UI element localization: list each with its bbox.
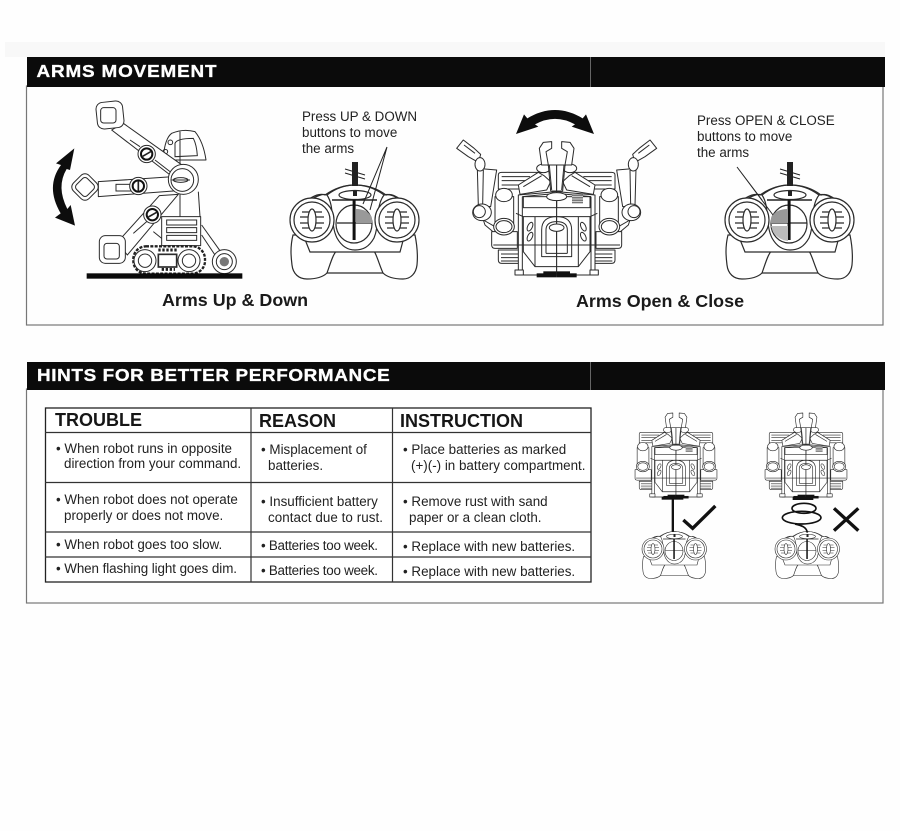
row: does not operate: • Remove rust with sand — [403, 494, 548, 509]
table header row: REASON — [259, 411, 336, 431]
robot front small — [635, 413, 717, 498]
row: opposite direction: • Place batteries as marked — [403, 442, 566, 457]
row: does not operate: contact due to rust. — [268, 510, 383, 525]
heading: hints — [27, 362, 885, 390]
panel: hints for better performance — [26, 362, 885, 603]
row: opposite direction: batteries. — [268, 458, 323, 473]
row: too slow: • Batteries too week. — [261, 538, 378, 553]
row: opposite direction — [56, 441, 586, 473]
icon: curved open and close arrow — [516, 110, 594, 134]
remote small — [642, 532, 706, 578]
table header row: TROUBLE — [55, 410, 142, 430]
row: does not operate: • Insufficient battery — [261, 494, 378, 509]
row: light dim — [56, 561, 575, 579]
row: does not operate: paper or a clean cloth. — [409, 510, 542, 525]
row: light dim: • Replace with new batteries. — [403, 564, 575, 579]
row: too slow: • When robot goes too slow. — [56, 537, 222, 552]
caption: arms open and close: Arms Open & Close — [576, 291, 744, 311]
diagram: incorrect antenna coiled — [765, 413, 858, 578]
panel: arms movement — [26, 57, 885, 325]
row: opposite direction: • When robot runs in opposite — [56, 441, 232, 456]
instruction: up and down: Press UP & DOWN — [302, 109, 417, 124]
robot front view — [457, 140, 657, 277]
row: opposite direction: • Misplacement of — [261, 442, 367, 457]
instruction: open and close: the arms — [697, 145, 749, 160]
remote: up and down buttons — [290, 162, 419, 279]
robot front small — [765, 413, 847, 498]
row: does not operate: properly or does not move. — [64, 508, 223, 523]
remote small — [775, 532, 840, 578]
row: light dim: • When flashing light goes dim. — [56, 561, 237, 576]
row: too slow — [56, 537, 575, 554]
instruction: up and down: buttons to move — [302, 125, 397, 140]
heading: arms movement — [27, 57, 885, 87]
row: does not operate: • When robot does not operate — [56, 492, 238, 507]
instruction: open and close: buttons to move — [697, 129, 792, 144]
row: opposite direction: direction from your command. — [64, 456, 241, 471]
caption: arms up and down: Arms Up & Down — [162, 290, 308, 310]
table header row: INSTRUCTION — [400, 411, 523, 431]
instruction: open and close: Press OPEN & CLOSE — [697, 113, 835, 128]
antenna straight and check mark — [662, 497, 715, 532]
troubleshooting table — [45, 408, 591, 582]
diagram: correct antenna straight — [635, 413, 717, 578]
instruction: up and down: the arms — [302, 141, 354, 156]
pointer lines: up and down — [363, 147, 387, 210]
heading: hints: HINTS FOR BETTER PERFORMANCE — [37, 364, 390, 385]
remote: open and close buttons — [725, 162, 854, 279]
coiled antenna and cross mark — [782, 497, 858, 533]
row: light dim: • Batteries too week. — [261, 563, 378, 578]
table header row — [55, 410, 523, 431]
pointer lines: open and close — [737, 167, 773, 215]
instruction: open and close — [697, 113, 835, 160]
icon: curved up and down arrow — [53, 148, 75, 226]
heading: arms movement: ARMS MOVEMENT — [36, 60, 217, 81]
row: does not operate — [56, 492, 548, 525]
robot side view — [69, 100, 242, 279]
row: opposite direction: (+)(-) in battery compartment. — [411, 458, 586, 473]
row: too slow: • Replace with new batteries. — [403, 539, 575, 554]
instruction: up and down — [302, 109, 417, 156]
scan shadow band — [5, 42, 885, 57]
